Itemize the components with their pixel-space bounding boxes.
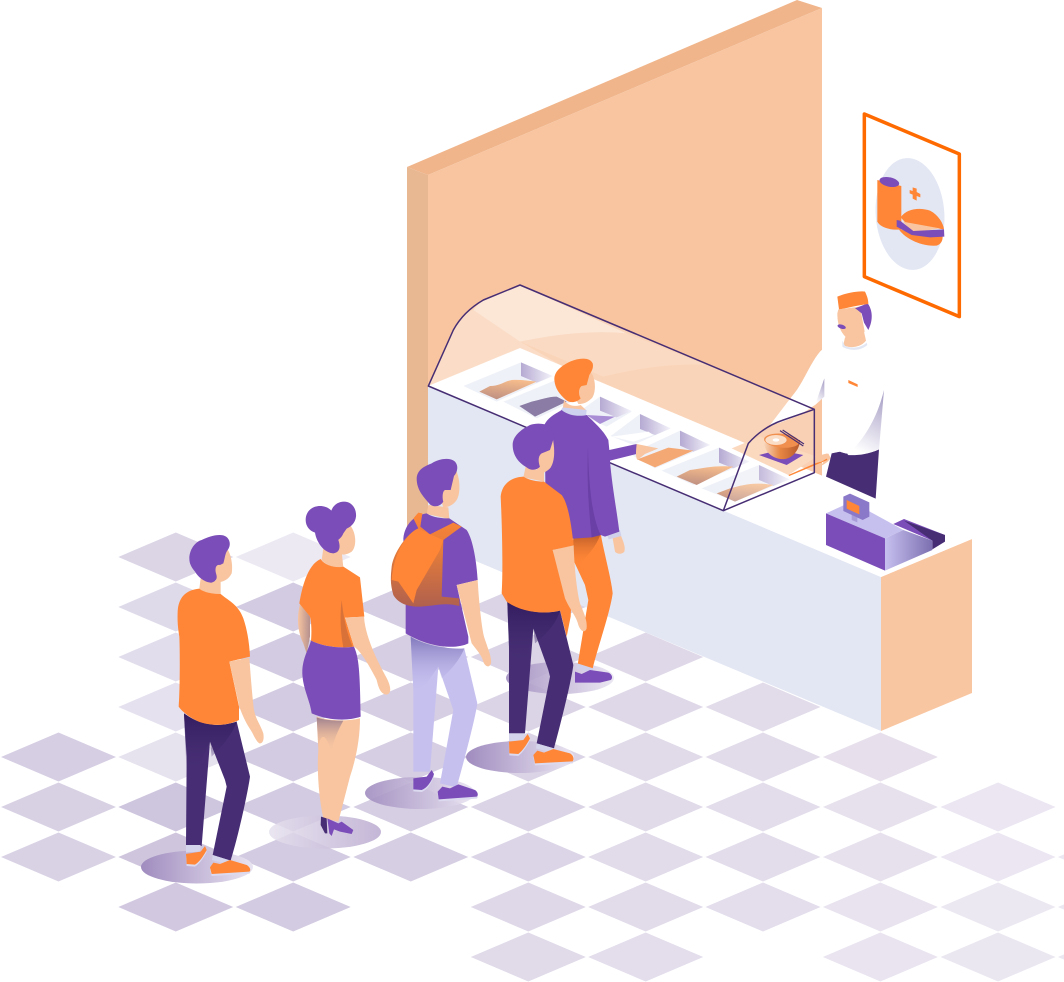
food compartments [463,362,789,502]
customer: backpack [391,459,491,801]
floor tiles [1,532,1064,982]
poster [864,114,959,317]
bowl on tray inside display [732,430,830,476]
customer at the counter: purple sweater [544,359,658,683]
counter [428,348,972,731]
customer: orange shirt, second in line [501,424,587,765]
floor shadows under customers [141,662,614,884]
customer: last in line [178,535,264,876]
cash register [826,494,945,571]
glass display case panes [428,285,814,511]
wall [407,0,822,540]
customer: woman in skirt [298,502,390,836]
chef [770,291,887,499]
glass display case outline [428,285,814,511]
